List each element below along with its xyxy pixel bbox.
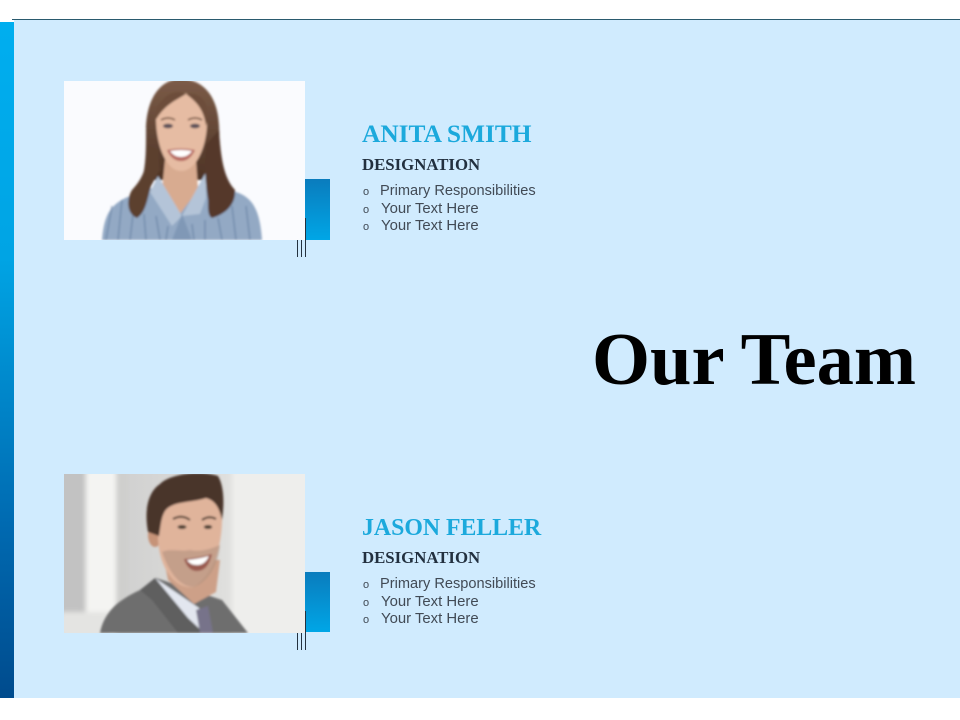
responsibilities list <box>363 576 536 627</box>
decorative vertical lines <box>297 218 306 257</box>
responsibilities list: Your Text Here <box>381 201 479 217</box>
photo: Anita Smith <box>64 81 305 240</box>
title: Our Team <box>592 319 916 401</box>
responsibilities list: o <box>363 597 369 609</box>
team member card: Anita Smith <box>64 81 536 257</box>
responsibilities list: o <box>363 579 369 591</box>
responsibilities list: o <box>363 186 369 198</box>
responsibilities list: Your Text Here <box>381 611 479 627</box>
responsibilities list: Primary Responsibilities <box>380 576 536 592</box>
name: JASON FELLER <box>362 515 541 541</box>
responsibilities list: Primary Responsibilities <box>380 183 536 199</box>
name: ANITA SMITH <box>362 120 532 148</box>
responsibilities list <box>363 183 536 234</box>
responsibilities list: o <box>363 204 369 216</box>
photo: Jason Feller <box>64 474 305 633</box>
team member card: Jason Feller <box>64 474 542 650</box>
responsibilities list: o <box>363 614 369 626</box>
responsibilities list: Your Text Here <box>381 594 479 610</box>
accent block <box>305 179 330 240</box>
decorative vertical lines <box>297 611 306 650</box>
responsibilities list: o <box>363 221 369 233</box>
responsibilities list: Your Text Here <box>381 218 479 234</box>
designation: DESIGNATION <box>362 548 480 567</box>
left gradient bar <box>0 22 14 698</box>
designation: DESIGNATION <box>362 155 480 174</box>
accent block <box>305 572 330 632</box>
top border line <box>12 19 960 20</box>
